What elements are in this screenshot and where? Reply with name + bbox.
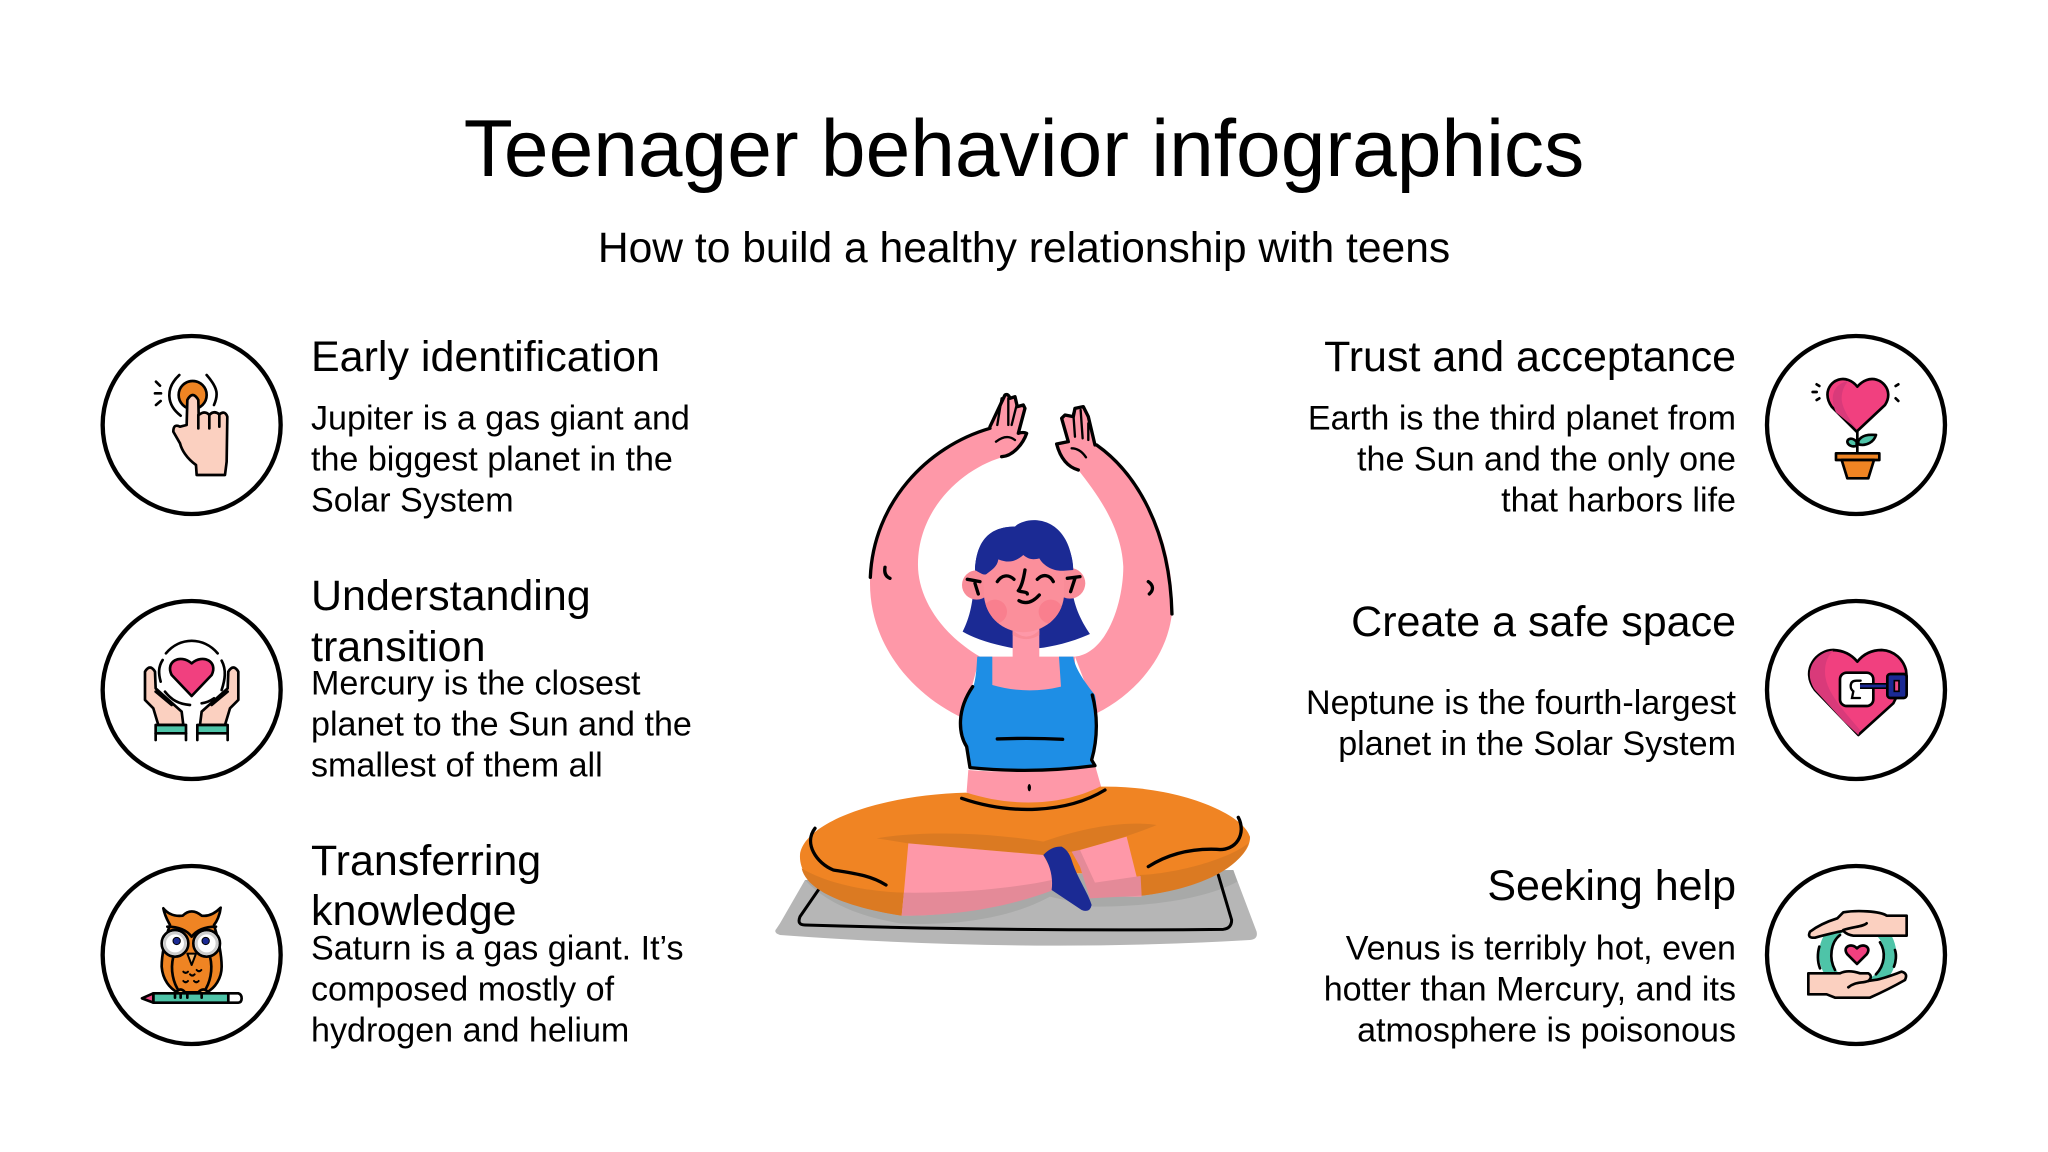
panel: transferring knowledge bbox=[103, 837, 684, 1050]
text block bbox=[311, 400, 690, 520]
hands bbox=[990, 395, 1027, 457]
hair bbox=[963, 520, 1090, 648]
title: Teenager behavior infographics bbox=[464, 104, 1584, 194]
text block bbox=[1324, 930, 1736, 1050]
ears bbox=[962, 570, 991, 600]
text block: hydrogen and helium bbox=[311, 1012, 629, 1050]
text block bbox=[1306, 684, 1737, 763]
text block: hotter than Mercury, and its bbox=[1324, 970, 1736, 1008]
panel: create a safe space bbox=[1306, 598, 1945, 779]
crop top bbox=[961, 657, 1097, 771]
heading: transition bbox=[311, 623, 485, 671]
heading: Seeking help bbox=[1487, 862, 1736, 910]
text block: Neptune is the fourth-largest bbox=[1306, 684, 1737, 722]
heading bbox=[311, 837, 541, 935]
text block bbox=[311, 664, 692, 784]
text block: composed mostly of bbox=[311, 970, 615, 1008]
text block: smallest of them all bbox=[311, 746, 603, 784]
icon: tapping hand bbox=[103, 336, 281, 514]
heading: Transferring bbox=[311, 837, 541, 885]
icon: hands holding heart bbox=[103, 601, 281, 779]
subtitle: How to build a healthy relationship with teens bbox=[598, 224, 1450, 272]
bangs bbox=[975, 522, 1073, 575]
text block: the Sun and the only one bbox=[1357, 440, 1736, 478]
heading bbox=[311, 572, 591, 671]
text block: Venus is terribly hot, even bbox=[1346, 930, 1736, 968]
panel: early identification bbox=[103, 333, 690, 520]
text block: that harbors life bbox=[1501, 482, 1736, 520]
upper body bbox=[870, 395, 1173, 771]
heading: Understanding bbox=[311, 572, 591, 620]
panel: trust and acceptance bbox=[1308, 333, 1945, 520]
text block: Mercury is the closest bbox=[311, 664, 641, 702]
text block: planet to the Sun and the bbox=[311, 706, 692, 744]
arm outlines bbox=[870, 428, 1172, 614]
text block: Saturn is a gas giant. It’s bbox=[311, 930, 684, 968]
text block: planet in the Solar System bbox=[1338, 725, 1736, 763]
face bbox=[983, 550, 1064, 632]
panel: seeking help bbox=[1324, 862, 1945, 1050]
crop top outlines bbox=[960, 687, 1096, 770]
text block bbox=[1308, 400, 1736, 520]
neck bbox=[1013, 627, 1039, 660]
panel: understanding transition bbox=[103, 572, 692, 784]
text block: Earth is the third planet from bbox=[1308, 400, 1736, 438]
chest bbox=[978, 657, 1075, 697]
heading: knowledge bbox=[311, 887, 517, 935]
text block: the biggest planet in the bbox=[311, 440, 673, 478]
icon: heart plant in pot bbox=[1767, 336, 1945, 514]
illustration: meditating woman bbox=[775, 395, 1257, 946]
icon: heart with key bbox=[1767, 601, 1945, 779]
arms bbox=[870, 428, 1173, 718]
text block bbox=[311, 930, 684, 1050]
text block: Jupiter is a gas giant and bbox=[311, 400, 690, 438]
text block: atmosphere is poisonous bbox=[1357, 1012, 1736, 1050]
heading: Trust and acceptance bbox=[1324, 333, 1736, 381]
icon: owl on pencil bbox=[103, 866, 281, 1044]
heading: Create a safe space bbox=[1351, 598, 1736, 646]
icon: hands protecting heart bbox=[1767, 866, 1945, 1044]
facial lines bbox=[967, 570, 1080, 603]
yoga mat and legs bbox=[775, 765, 1257, 946]
heading: Early identification bbox=[311, 333, 660, 381]
text block: Solar System bbox=[311, 482, 514, 520]
